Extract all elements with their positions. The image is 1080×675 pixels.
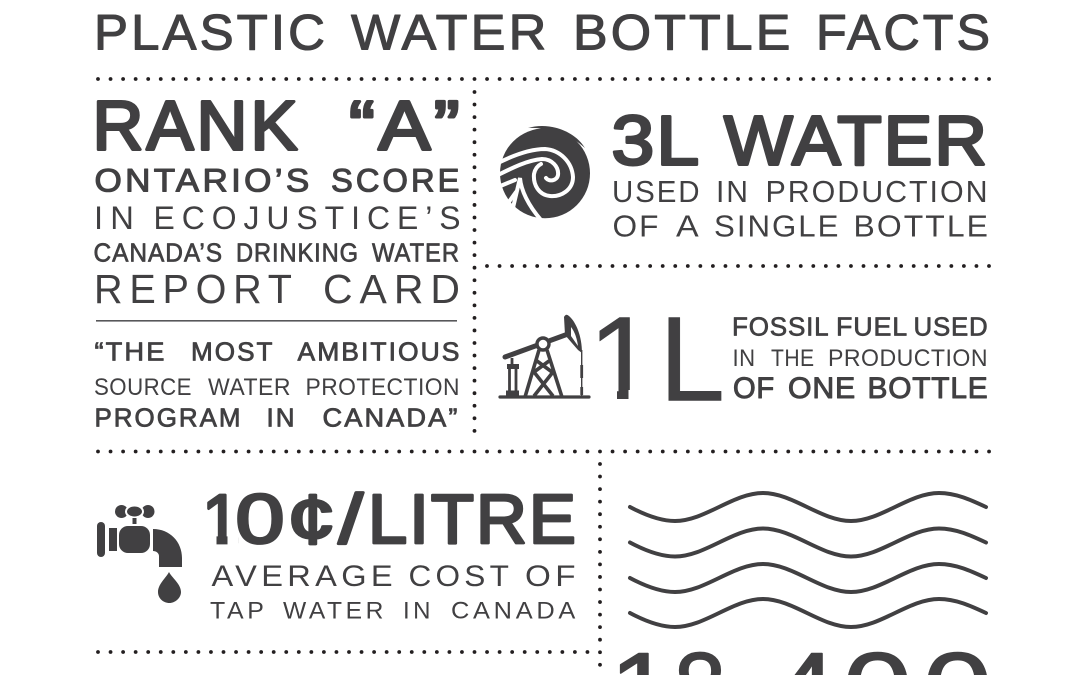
quote line 3: PROGRAM	[94, 403, 242, 433]
text: in the production: THE	[771, 345, 814, 372]
title: FACTS	[816, 4, 993, 60]
quote line 1: MOST	[191, 337, 274, 367]
heading: 10 cents per litre: 1	[202, 480, 242, 558]
heading: rank A: “A”	[349, 86, 463, 164]
text: Canada's drinking water: CANADA’S	[94, 238, 223, 268]
heading: 3L water: 3L	[612, 102, 698, 180]
text: used in production: PRODUCTION	[766, 174, 990, 209]
icon: tap	[97, 505, 182, 603]
text: of a single bottle: OF	[612, 208, 660, 244]
text: average cost of: COST	[408, 560, 512, 593]
quote line 2: WATER	[208, 374, 291, 401]
quote line 3: IN	[266, 403, 296, 433]
heading: 10 cents per litre: 0¢/	[236, 480, 366, 558]
icon: water swirl	[498, 120, 590, 220]
text: of one bottle: BOTTLE	[868, 372, 988, 405]
quote line 2: PROTECTION	[306, 374, 460, 401]
title: BOTTLE	[573, 4, 794, 60]
text: average cost of: OF	[525, 560, 580, 593]
rule	[96, 320, 457, 322]
quote line 1: AMBITIOUS	[298, 337, 462, 367]
heading: rank A: RANK	[92, 86, 300, 164]
text: in Ecojustice's: IN	[94, 200, 141, 236]
heading: 10 cents per litre: LITRE	[368, 480, 578, 558]
icon: water waves	[630, 493, 986, 627]
text: of one bottle: OF	[733, 372, 775, 405]
text: average cost of: AVERAGE	[212, 560, 397, 593]
text: of a single bottle: SINGLE	[714, 208, 840, 244]
text: in the production: IN	[732, 345, 756, 372]
text: in Ecojustice's: ECOJUSTICE’S	[154, 200, 468, 236]
panel: 3L water	[612, 102, 990, 244]
text: Ontario's score: SCORE	[331, 162, 462, 198]
text: of one bottle: ONE	[788, 372, 856, 405]
text: of a single bottle: A	[676, 208, 699, 244]
text: fossil fuel used: FOSSIL	[732, 312, 828, 342]
icon: oil pump	[500, 315, 589, 397]
text: fossil fuel used: FUEL	[836, 312, 907, 342]
text: tap water in Canada: WATER	[283, 598, 387, 624]
panel: 1L fossil fuel	[600, 316, 987, 401]
text: tap water in Canada: TAP	[210, 598, 267, 624]
title: PLASTIC	[94, 4, 328, 60]
text: fossil fuel used: USED	[914, 312, 988, 342]
text: used in production: IN	[716, 174, 750, 209]
text: in the production: PRODUCTION	[828, 345, 988, 372]
text: Canada's drinking water: DRINKING	[236, 238, 359, 268]
panel: 10 cents per litre	[207, 491, 576, 618]
text: tap water in Canada: IN	[403, 598, 434, 624]
heading: 1L: 1	[588, 290, 656, 426]
heading: 3L water: WATER	[724, 102, 989, 180]
heading: 1L: L	[659, 290, 725, 426]
text: Canada's drinking water: WATER	[372, 238, 460, 268]
title: WATER	[351, 4, 550, 60]
text: Ontario's score: ONTARIO’S	[94, 162, 312, 198]
quote line 2: SOURCE	[94, 374, 192, 401]
text: tap water in Canada: CANADA	[451, 598, 579, 624]
quote line 3: CANADA”	[322, 403, 460, 433]
text: of a single bottle: BOTTLE	[854, 208, 990, 244]
quote line 1: “THE	[94, 337, 166, 367]
text: report card: CARD	[323, 266, 467, 312]
text: report card: REPORT	[94, 266, 298, 312]
panel: rank A	[92, 86, 468, 433]
text: used in production: USED	[612, 174, 702, 209]
